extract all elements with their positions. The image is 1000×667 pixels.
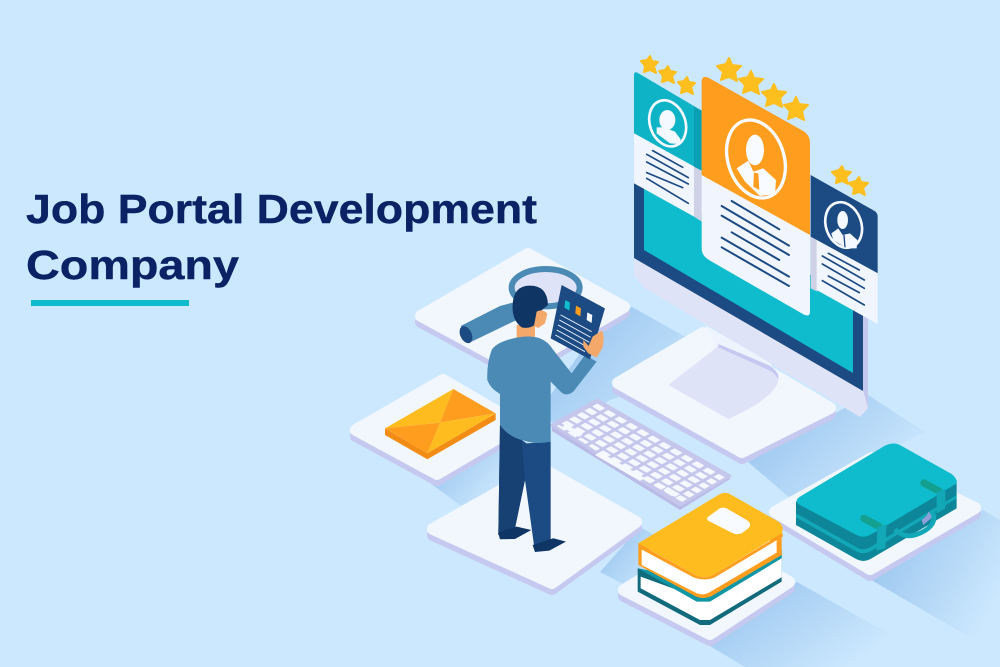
lower book xyxy=(638,550,782,625)
avatar xyxy=(717,112,795,206)
sweater xyxy=(487,336,597,443)
clipboard xyxy=(551,285,605,359)
keyboard xyxy=(552,400,730,510)
book label xyxy=(707,508,750,534)
platform: magnifier xyxy=(421,254,624,375)
monitor screen xyxy=(644,180,853,373)
icon: magnifying glass xyxy=(457,269,580,345)
cast shadows xyxy=(430,307,1000,667)
icon: books stack xyxy=(638,493,783,625)
monitor stand xyxy=(668,344,779,419)
title: Company xyxy=(26,242,239,288)
person reading a resume xyxy=(487,285,605,552)
neck xyxy=(517,325,535,340)
monitor neck xyxy=(705,325,778,378)
icon: envelope xyxy=(385,389,496,459)
icon: briefcase xyxy=(796,443,957,561)
platform: monitor base xyxy=(618,333,830,458)
resume lines xyxy=(722,201,789,286)
stars: center card xyxy=(717,58,808,120)
title underline xyxy=(31,300,189,306)
avatar xyxy=(643,95,692,152)
platform: envelope xyxy=(356,380,520,480)
head xyxy=(513,286,548,328)
handle xyxy=(922,512,933,525)
candidate card: right xyxy=(811,175,878,324)
monitor bezel xyxy=(634,175,863,391)
title: Job Portal Development xyxy=(26,186,537,232)
case top xyxy=(797,443,957,537)
book cover xyxy=(638,493,783,577)
monitor body xyxy=(634,180,868,417)
case body xyxy=(796,480,957,561)
platform: books xyxy=(624,538,789,640)
stars: right card xyxy=(832,166,868,195)
candidate card: center xyxy=(702,77,810,315)
straps xyxy=(859,478,945,551)
stars: left card xyxy=(641,56,695,94)
upper book xyxy=(638,528,782,598)
resume lines xyxy=(647,151,688,203)
title xyxy=(26,186,537,288)
resume lines xyxy=(822,253,864,305)
trousers xyxy=(498,425,551,545)
hand xyxy=(583,331,604,357)
shoes xyxy=(498,527,566,552)
candidate card: left xyxy=(634,72,702,222)
monitor xyxy=(634,175,868,419)
platform: person xyxy=(433,468,636,589)
avatar xyxy=(819,197,868,253)
platform: briefcase xyxy=(775,458,975,575)
